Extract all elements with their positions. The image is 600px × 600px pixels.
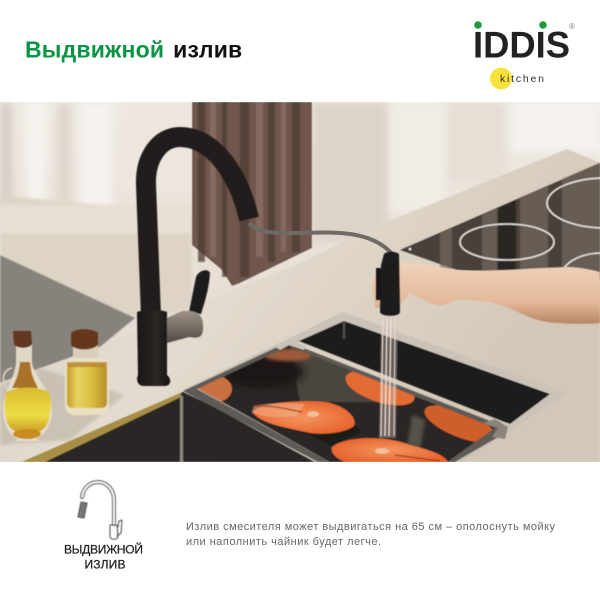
icon label: ВЫДВИЖНОЙ [64,542,143,556]
sprayer head [376,252,400,316]
icon label: ИЗЛИВ [84,558,126,572]
left bowl [22,392,330,462]
faucet [137,137,249,386]
rack plate [197,345,495,462]
rack frame [183,342,508,462]
icon: pull-out faucet [78,482,122,539]
bottle: right [65,329,109,415]
counter shadow [0,368,125,445]
title: Выдвижной излив [25,36,242,62]
logo: IDDIS kitchen: kitchen [500,73,544,85]
description text: Излив смесителя может выдвигаться на 65 см – ополоснуть мойку [186,521,556,533]
salmon steak 1 [252,401,362,446]
bottle: left [3,331,52,441]
faucet base [137,310,170,386]
water stream [379,317,398,438]
faucet lever [167,270,210,343]
logo: IDDIS kitchen: ® [569,22,575,31]
photo: kitchen scene [0,102,600,462]
salmon reflections [198,376,233,402]
sink rim [183,312,568,462]
background: curtains and floor [0,102,600,462]
logo: IDDIS kitchen [473,21,575,90]
logo: IDDIS kitchen: IDDIS [473,24,570,66]
countertop [0,149,600,462]
cooktop [400,162,600,280]
sink [22,312,568,462]
arm and hand [372,263,600,324]
description text: или наполнить чайник будет легче. [186,536,381,548]
brown curtain [192,102,312,286]
hose [249,223,393,255]
salmon steak 2 [332,438,448,462]
right bowl [299,321,550,424]
faucet spout [146,137,249,316]
cooktop rings [458,176,600,268]
rug [0,255,135,383]
